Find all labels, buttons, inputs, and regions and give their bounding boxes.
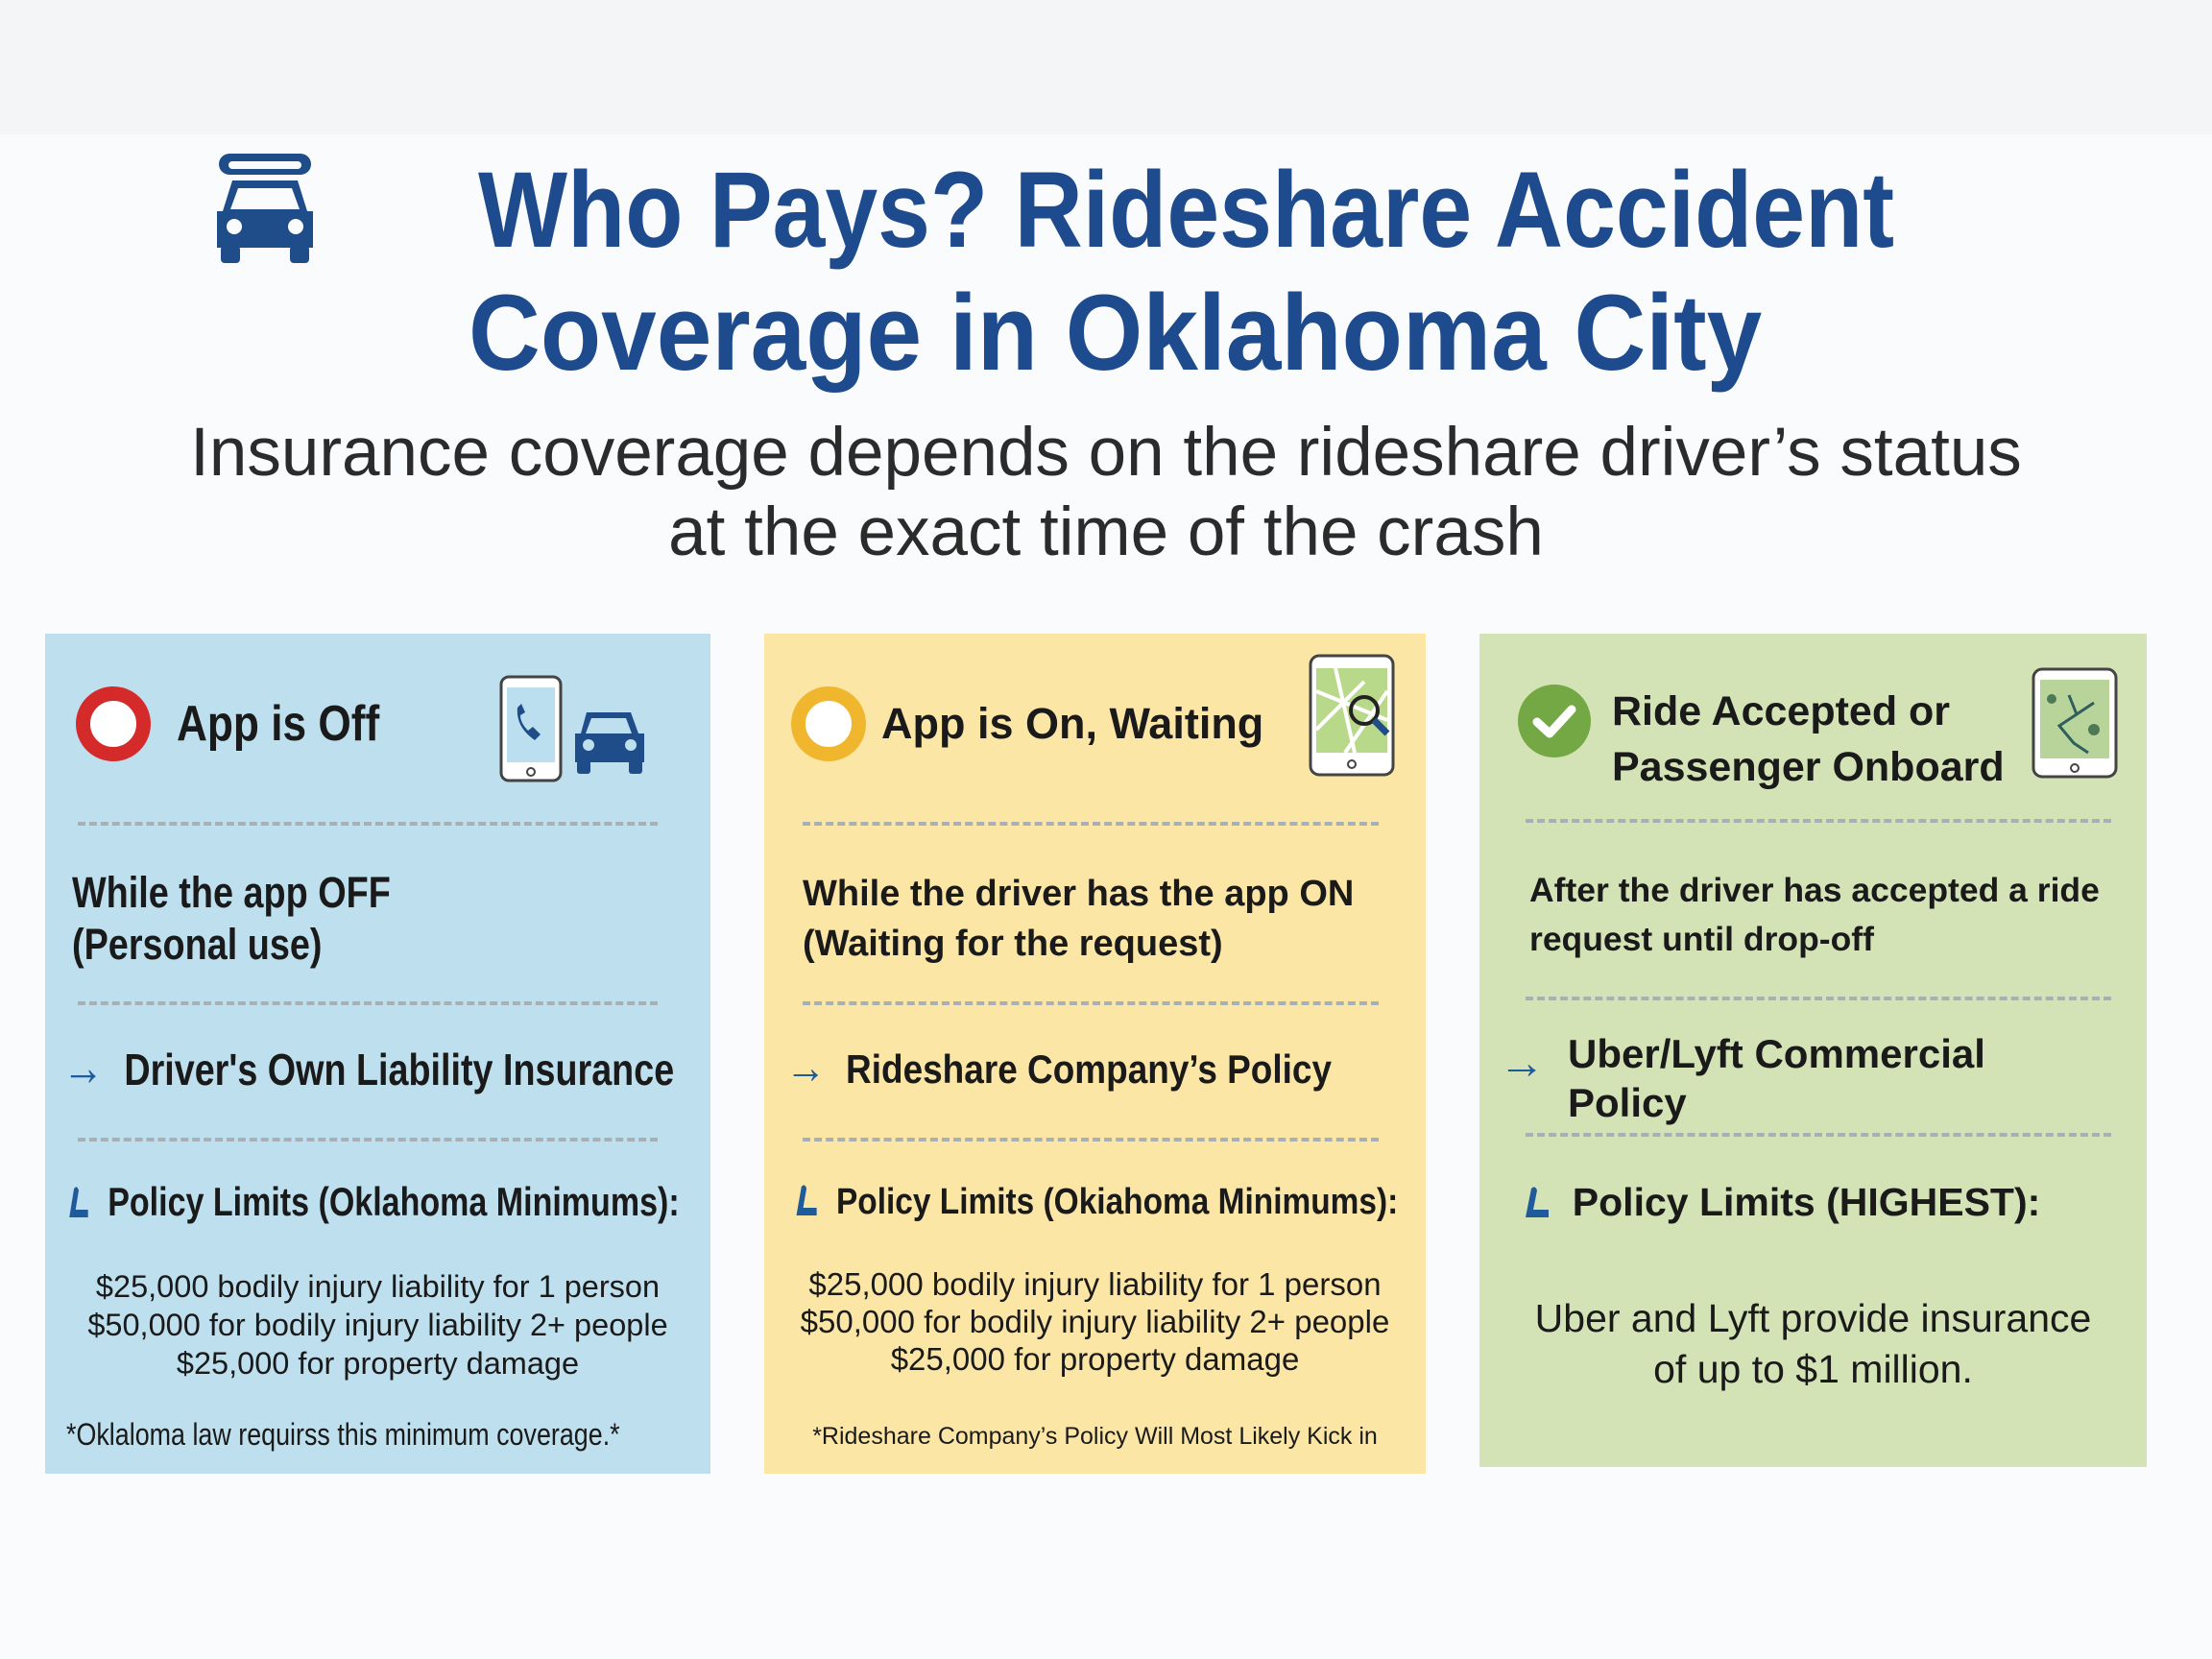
- coverage: uber/lyft: Uber/Lyft Commercial: [1568, 1031, 1985, 1076]
- icon: yellow ring: [791, 686, 866, 761]
- description: (Waiting for the request): [803, 924, 1223, 964]
- description: While the app OFF: [72, 868, 391, 917]
- description: While the driver has the app ON: [803, 874, 1354, 914]
- subtitle: Insurance coverage depends on the rideshare driver’s status: [190, 415, 2022, 491]
- description: [803, 874, 1354, 964]
- policy limits heading: Policy Limits (Oklahoma Minimums):: [108, 1179, 680, 1224]
- coverage amount: [1535, 1296, 2091, 1391]
- coverage: uber/lyft: →: [1499, 1037, 1545, 1089]
- panel: ride accepted: [1479, 634, 2147, 1467]
- policy limits heading: Policy Limits (HIGHEST):: [1573, 1180, 2040, 1224]
- subtitle: [190, 415, 2022, 570]
- limits list: [801, 1266, 1389, 1377]
- limits list: $50,000 for bodily injury liability 2+ people: [801, 1304, 1389, 1339]
- coverage amount: of up to $1 million.: [1653, 1347, 1973, 1391]
- icon: phone and car: [499, 676, 644, 781]
- panel: app is off: [45, 634, 710, 1474]
- description: After the driver has accepted a ride: [1529, 871, 2100, 909]
- icon: red ring: [76, 686, 151, 761]
- coverage amount: Uber and Lyft provide insurance: [1535, 1296, 2091, 1340]
- coverage: uber/lyft: Policy: [1568, 1080, 1687, 1125]
- limits list: $25,000 bodily injury liability for 1 person: [808, 1266, 1382, 1302]
- limits list: $50,000 for bodily injury liability 2+ people: [87, 1308, 668, 1342]
- policy limits heading: Policy Limits (Okiahoma Minimums):: [836, 1182, 1398, 1222]
- heading: App is Off: [177, 696, 379, 752]
- title: [469, 150, 1894, 393]
- heading: Ride Accepted or: [1612, 688, 1950, 734]
- panel: app on waiting: [764, 634, 1426, 1474]
- description: [72, 868, 391, 969]
- limits list: $25,000 bodily injury liability for 1 person: [96, 1269, 660, 1304]
- footnote: *Rideshare Company’s Policy Will Most Likely Kick in: [812, 1423, 1378, 1450]
- icon: phone route: [2032, 668, 2118, 778]
- limits list: [87, 1269, 668, 1381]
- coverage: rideshare company: → Rideshare Company’s Policy: [785, 1042, 1332, 1094]
- icon: phone map: [1310, 655, 1394, 776]
- subtitle: at the exact time of the crash: [668, 494, 1544, 570]
- icon: car: [217, 154, 313, 263]
- coverage: driver's own: → Driver's Own Liability Insurance: [62, 1040, 674, 1096]
- description: [1529, 871, 2100, 958]
- top band: [0, 0, 2212, 134]
- heading: Passenger Onboard: [1612, 744, 2005, 790]
- heading: App is On, Waiting: [881, 699, 1263, 748]
- icon: green check: [1518, 685, 1591, 757]
- title: Coverage in Oklahoma City: [469, 273, 1762, 393]
- description: (Personal use): [72, 920, 322, 969]
- description: request until drop-off: [1529, 920, 1874, 958]
- heading: [1612, 688, 2005, 790]
- limits list: $25,000 for property damage: [177, 1346, 579, 1381]
- limits list: $25,000 for property damage: [891, 1341, 1299, 1377]
- title: Who Pays? Rideshare Accident: [478, 150, 1894, 270]
- footnote: *Oklaloma law requirss this minimum coverage.*: [66, 1417, 620, 1452]
- coverage: uber/lyft: [1499, 1031, 1985, 1125]
